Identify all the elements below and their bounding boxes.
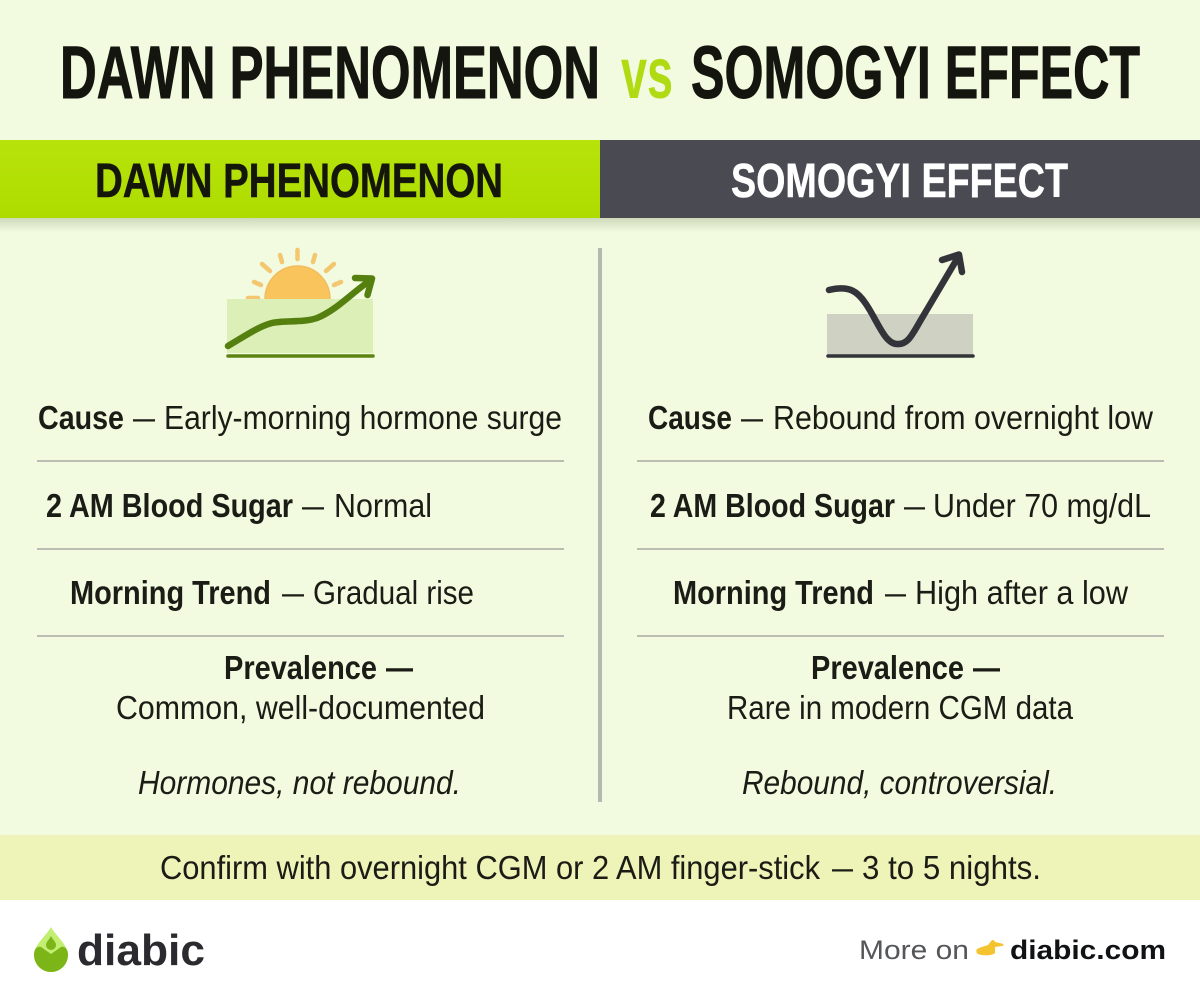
prevalence text: somogyi: Rare in modern CGM data (727, 689, 1074, 726)
callout band: Confirm with overnight CGM or 2 AM finger-stick (160, 849, 820, 886)
morning trend row: dawn: — (282, 574, 304, 611)
callout band (0, 835, 1200, 900)
blood sugar row: somogyi: 2 AM Blood Sugar (650, 487, 895, 524)
icon: dip and rebound arrow (827, 254, 973, 356)
summary: dawn: Hormones, not rebound. (138, 764, 461, 801)
blood sugar row: somogyi: — (904, 487, 925, 524)
panel header: somogyi effect (600, 140, 1200, 218)
callout band: — (832, 849, 853, 886)
cause row: somogyi: — (741, 399, 763, 436)
callout band: 3 to 5 nights. (862, 849, 1041, 886)
blood sugar row: somogyi: Under 70 mg/dL (933, 487, 1151, 524)
title: vs (621, 34, 673, 114)
more on diabic.com: More on (859, 935, 969, 965)
cause row: somogyi: Cause (648, 399, 732, 436)
prevalence heading: dawn: Prevalence (224, 649, 377, 686)
more on diabic.com: diabic.com (1010, 935, 1166, 965)
blood sugar row: dawn: — (302, 487, 324, 524)
icon: pointing hand (976, 940, 1004, 955)
blood sugar row: dawn: 2 AM Blood Sugar (46, 487, 293, 524)
morning trend row: somogyi: — (885, 574, 906, 611)
cause row: somogyi: Rebound from overnight low (773, 399, 1153, 436)
morning trend row: dawn: Gradual rise (313, 574, 474, 611)
prevalence heading: somogyi: — (973, 649, 1000, 686)
panel header: dawn phenomenon (0, 140, 600, 218)
title: DAWN PHENOMENON (60, 31, 600, 114)
right column rows (648, 399, 1153, 801)
blood sugar row: dawn: Normal (334, 487, 432, 524)
prevalence text: dawn: Common, well-documented (116, 689, 485, 726)
blood sugar row: somogyi (650, 487, 1151, 524)
morning trend row: somogyi: High after a low (915, 574, 1128, 611)
panel header: dawn phenomenon: DAWN PHENOMENON (95, 155, 503, 208)
more on diabic.com (859, 935, 1166, 965)
icon: sunrise with rising arrow (227, 250, 373, 356)
prevalence heading: somogyi: Prevalence (811, 649, 964, 686)
cause row: dawn: — (133, 399, 155, 436)
morning trend row: somogyi (673, 574, 1128, 611)
left column rows (38, 399, 562, 801)
panel header: somogyi effect: SOMOGYI EFFECT (731, 155, 1068, 208)
cause row: dawn: Early-morning hormone surge (164, 399, 562, 436)
footer (0, 900, 1200, 1000)
morning trend row: dawn: Morning Trend (70, 574, 271, 611)
prevalence heading: dawn: — (386, 649, 413, 686)
morning trend row: dawn (70, 574, 474, 611)
summary: somogyi: Rebound, controversial. (742, 764, 1057, 801)
logo: diabic: diabic (77, 926, 205, 975)
morning trend row: somogyi: Morning Trend (673, 574, 874, 611)
cause row: dawn: Cause (38, 399, 124, 436)
